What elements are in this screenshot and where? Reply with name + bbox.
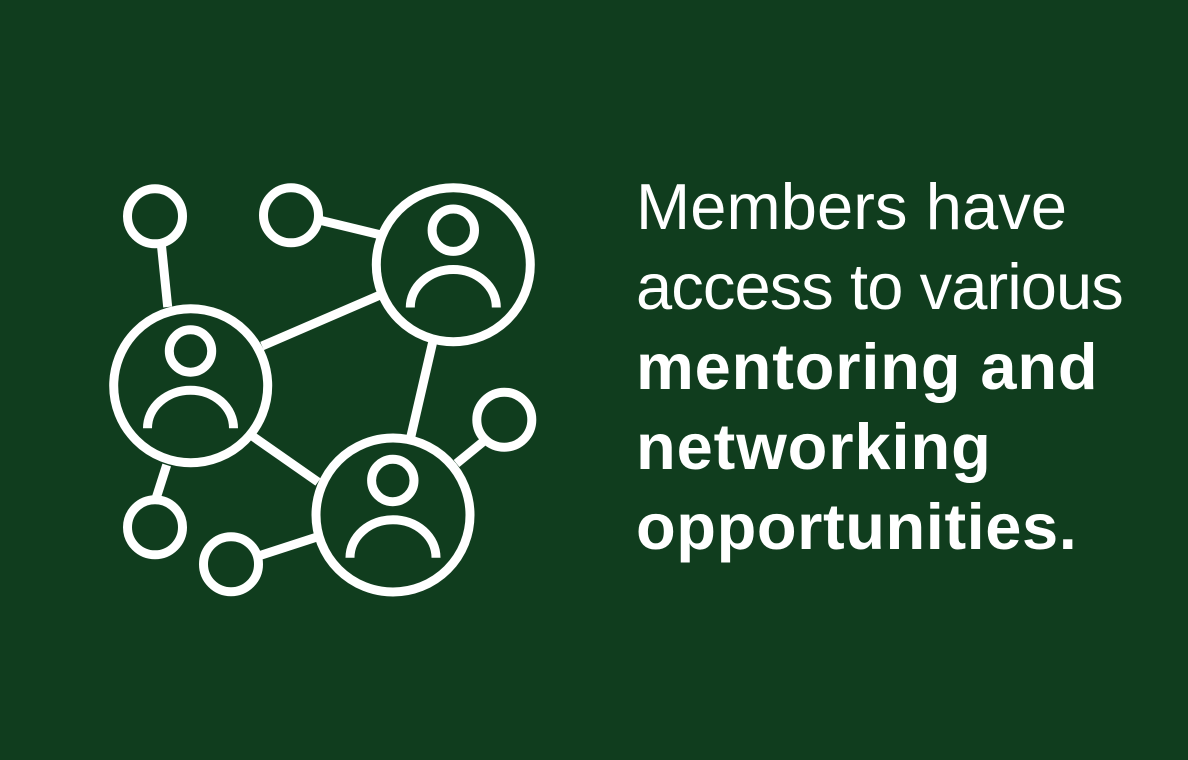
- person node: top right: [376, 188, 530, 342]
- text block: message: networking: [636, 410, 992, 483]
- satellite nodes: [128, 188, 532, 592]
- icon: network of people: [109, 183, 536, 596]
- person node: bottom: [316, 438, 470, 592]
- text block: message: opportunities.: [636, 490, 1077, 563]
- text block: message: access to various: [636, 250, 1123, 323]
- person node: left: [114, 309, 268, 463]
- connector lines: [156, 220, 484, 556]
- text block: message: mentoring and: [636, 330, 1098, 403]
- text block: message: Members have: [636, 170, 1067, 243]
- text block: message: [636, 170, 1123, 563]
